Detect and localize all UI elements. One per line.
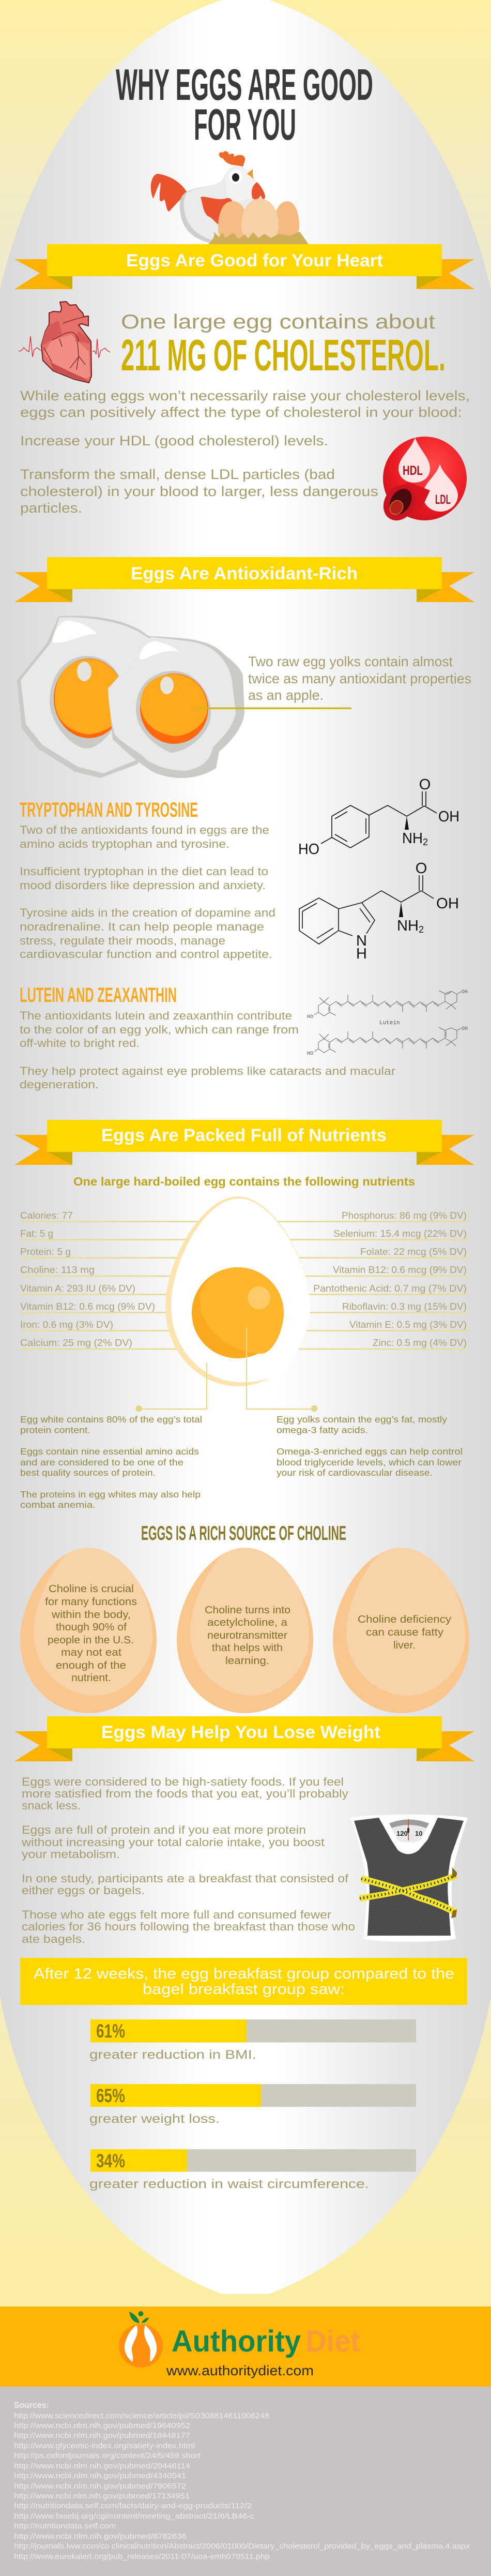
bar chart: 34%: greater reduction in waist circumference.	[89, 2177, 369, 2191]
heading ribbon: nutrients	[14, 1120, 474, 1165]
title: FOR YOU	[194, 100, 296, 149]
chart: tryptophan molecule: 2	[419, 924, 424, 935]
heading ribbon: heart: Eggs Are Good for Your Heart	[126, 251, 383, 271]
text block: tryptophan and tyrosine: noradrenaline. It can help people manage	[20, 920, 264, 933]
text block: lutein and zeaxanthin: to the color of an egg yolk, which can range from	[20, 1023, 299, 1036]
nutrients right column: Folate: 22 mcg (5% DV)	[360, 1246, 467, 1257]
heading ribbon: nutrients: Eggs Are Packed Full of Nutrients	[101, 1126, 387, 1145]
text block: cholesterol: Transform the small, dense LDL particles (bad	[20, 467, 335, 482]
chart: tyrosine molecule: O	[419, 776, 431, 793]
panel: choline egg 1: Choline is crucial	[49, 1583, 134, 1595]
icon: bathroom scale with tape: 120	[396, 1830, 408, 1837]
panel: choline egg 1: though 90% of	[56, 1621, 127, 1633]
heading ribbon: antioxidants: Eggs Are Antioxidant-Rich	[131, 564, 358, 583]
heading: tryptophan and tyrosine: TRYPTOPHAN AND TYROSINE	[20, 799, 198, 821]
text block: weight: more satisfied from the foods that you eat, you’ll probably	[22, 1787, 348, 1800]
nutrients left column: Fat: 5 g	[20, 1228, 53, 1239]
nutrients left column: Vitamin B12: 0.6 mcg (9% DV)	[20, 1301, 155, 1312]
connector: egg white	[135, 1362, 207, 1412]
panel: choline egg 3: Choline deficiency	[358, 1613, 452, 1625]
panel: choline egg 2	[177, 1541, 313, 1713]
panel: choline egg 3: liver.	[393, 1639, 416, 1651]
panel: sources: http://www.sciencedirect.com/science/article/pii/S0308814611006248	[14, 2412, 269, 2420]
nutrients right column: Zinc: 0.5 mg (4% DV)	[373, 1337, 467, 1348]
chart: tyrosine molecule: HO	[298, 841, 319, 858]
text block: tryptophan and tyrosine: Insufficient tryptophan in the diet can lead to	[20, 865, 268, 878]
panel: sources: http://www.ncbi.nlm.nih.gov/pubmed/19640952	[14, 2421, 190, 2430]
bar chart: 61%: greater reduction in BMI.	[89, 2048, 256, 2062]
cholesterol stat	[121, 311, 446, 380]
nutrients right column	[313, 1210, 467, 1348]
footer: logo band	[0, 2307, 491, 2387]
panel: sources: Sources:	[14, 2400, 49, 2410]
bar chart: 34%	[89, 2149, 416, 2191]
text block: weight: Those who ate eggs felt more full and consumed fewer	[22, 1908, 331, 1921]
text block: egg white: best quality sources of protein.	[20, 1467, 156, 1478]
panel: choline egg 2: Choline turns into	[205, 1604, 290, 1616]
text block: lutein and zeaxanthin: They help protect against eye problems like cataracts and macular	[20, 1065, 395, 1077]
nutrient leader lines	[20, 1221, 468, 1350]
bar chart: 61%	[89, 2019, 416, 2062]
icon: two fried eggs	[17, 616, 244, 778]
icon: Authority Diet logo	[119, 2311, 163, 2368]
callout: after 12 weeks: bagel breakfast group saw:	[143, 1981, 345, 1998]
text block: egg white: combat anemia.	[20, 1500, 96, 1510]
text block: egg yolk: omega-3 fatty acids.	[277, 1425, 368, 1435]
text block: egg yolk	[277, 1414, 463, 1478]
panel: choline egg 2: acetylcholine, a	[207, 1616, 288, 1628]
chart: lutein molecule: OH	[462, 1026, 468, 1032]
text block: weight: ate bagels.	[22, 1933, 85, 1945]
chart: tryptophan molecule: H	[356, 946, 367, 962]
text block: cholesterol: cholesterol) in your blood to larger, less dangerous	[20, 484, 378, 499]
panel: choline egg 2: neurotransmitter	[207, 1629, 287, 1641]
text block: tryptophan and tyrosine	[20, 823, 275, 961]
panel: sources: http://ps.oxfordjournals.org/content/24/5/459.short	[14, 2451, 201, 2460]
nutrients left column: Calcium: 25 mg (2% DV)	[20, 1337, 132, 1348]
text block: egg white: The proteins in egg whites may also help	[20, 1489, 201, 1500]
text block: tryptophan and tyrosine: mood disorders like depression and anxiety.	[20, 879, 266, 892]
chart: tyrosine molecule: OH	[438, 808, 459, 825]
chart: lutein molecule: Lutein	[379, 1020, 400, 1026]
bar chart: 61%: 61%	[96, 2020, 125, 2042]
text block: lutein and zeaxanthin	[20, 1009, 395, 1091]
icon: bathroom scale with tape	[350, 1815, 468, 1942]
text block: raw egg yolks: as an apple.	[248, 687, 324, 703]
footer: logo band: Authority	[172, 2325, 301, 2358]
callout: after 12 weeks: After 12 weeks, the egg breakfast group compared to the	[34, 1966, 454, 1982]
text block: weight: snack less.	[22, 1799, 81, 1812]
nutrients right column: Vitamin E: 0.5 mg (3% DV)	[349, 1319, 467, 1330]
panel: choline egg 3	[333, 1541, 469, 1713]
text block: egg yolk: blood triglyceride levels, which can lower	[277, 1457, 462, 1467]
text block: raw egg yolks: Two raw egg yolks contain almost	[248, 654, 453, 669]
panel: choline egg 1: people in the U.S.	[48, 1634, 134, 1646]
text block: cholesterol: Increase your HDL (good cholesterol) levels.	[20, 433, 328, 448]
icon: hard-boiled egg	[165, 1196, 310, 1386]
panel: sources: http://www.eurekalert.org/pub_releases/2011-07/uoa-emh070511.php	[14, 2552, 270, 2561]
callout: after 12 weeks	[20, 1958, 467, 2005]
text block: egg white: Eggs contain nine essential amino acids	[20, 1446, 199, 1457]
panel: choline egg 1: nutrient.	[71, 1672, 111, 1684]
panel: sources: http://www.ncbi.nlm.nih.gov/pubmed/8782636	[14, 2532, 187, 2541]
nutrients left column: Calories: 77	[20, 1210, 73, 1221]
icon: bathroom scale with tape: 10	[415, 1830, 422, 1837]
cholesterol stat: One large egg contains about	[121, 311, 435, 333]
heading ribbon: heart	[14, 244, 474, 289]
chart: lutein molecule: HO	[307, 1051, 313, 1057]
panel: sources: http://nutritiondata.self.com	[14, 2522, 116, 2530]
panel: choline egg 1	[20, 1541, 157, 1713]
panel: choline egg 2: that helps with	[212, 1642, 283, 1654]
connector: egg yolk	[247, 1327, 317, 1412]
panel: sources: http://www.fasebj.org/cgi/content/meeting_abstract/21/6/LB46-c	[14, 2512, 255, 2521]
chart: tryptophan molecule: N	[356, 933, 367, 949]
chart: lutein molecule: HO	[307, 1014, 313, 1020]
bar chart: 65%	[89, 2084, 416, 2126]
text block: cholesterol: eggs can positively affect the type of cholesterol in your blood:	[20, 405, 462, 420]
icon: HDL and LDL blood sphere: LDL	[435, 492, 451, 507]
text block: egg yolk: your risk of cardiovascular disease.	[277, 1467, 433, 1478]
chart: tyrosine molecule: 2	[423, 837, 428, 847]
text block: egg white: Egg white contains 80% of the egg’s total	[20, 1414, 202, 1425]
chart: tyrosine molecule: NH	[402, 830, 423, 847]
nutrients left column: Vitamin A: 293 IU (6% DV)	[20, 1283, 135, 1294]
heading ribbon: weight	[14, 1716, 474, 1761]
panel: choline egg 3: can cause fatty	[366, 1626, 444, 1638]
panel: sources: http://nutritiondata.self.com/facts/dairy-and-egg-products/112/2	[14, 2502, 252, 2510]
chart: tyrosine molecule	[298, 776, 459, 858]
icon: HDL and LDL blood sphere: HDL	[403, 463, 423, 478]
subheading: nutrients: One large hard-boiled egg contains the following nutrients	[73, 1175, 415, 1188]
text block: tryptophan and tyrosine: cardiovascular function and control appetite.	[20, 948, 272, 961]
icon: heart with pulse	[19, 302, 110, 383]
text block: raw egg yolks	[248, 654, 471, 703]
heading: lutein and zeaxanthin: LUTEIN AND ZEAXANTHIN	[20, 984, 177, 1007]
nutrients right column: Selenium: 15.4 mcg (22% DV)	[333, 1228, 467, 1239]
chart: tryptophan molecule: NH	[397, 918, 419, 934]
nutrients right column: Pantothenic Acid: 0.7 mg (7% DV)	[313, 1283, 467, 1294]
panel: sources: http://www.ncbi.nlm.nih.gov/pubmed/7906572	[14, 2482, 186, 2491]
nutrients left column: Iron: 0.6 mg (3% DV)	[20, 1319, 113, 1330]
chart: tryptophan molecule: O	[416, 860, 427, 877]
bar chart: 65%: greater weight loss.	[89, 2112, 220, 2126]
footer: logo band: Diet	[305, 2325, 360, 2358]
text block: weight: without increasing your total calorie intake, you boost	[21, 1836, 325, 1849]
title	[116, 61, 373, 149]
text block: weight: your metabolism.	[22, 1848, 120, 1861]
chart: tryptophan molecule	[299, 860, 459, 962]
chart: lutein molecule: OH	[462, 990, 468, 995]
panel: choline egg 1: for many functions	[45, 1596, 137, 1608]
panel: sources: http://www.glycemic-index.org/satiety-index.html	[14, 2442, 195, 2450]
text block: cholesterol: While eating eggs won’t necessarily raise your cholesterol levels,	[20, 388, 470, 403]
text block: lutein and zeaxanthin: The antioxidants lutein and zeaxanthin contribute	[20, 1009, 292, 1022]
text block: egg white: protein content.	[20, 1425, 90, 1435]
panel: sources: http://www.ncbi.nlm.nih.gov/pubmed/4340541	[14, 2472, 186, 2480]
text block: weight	[21, 1775, 355, 1945]
panel: choline egg 1: enough of the	[56, 1659, 126, 1671]
text block: egg yolk: Egg yolks contain the egg’s fat, mostly	[277, 1414, 447, 1425]
text block: egg yolk: Omega-3-enriched eggs can help control	[277, 1446, 463, 1457]
nutrients right column: Vitamin B12: 0.6 mcg (9% DV)	[333, 1264, 467, 1275]
chart: lutein molecule	[307, 990, 468, 1057]
text block: weight: Eggs were considered to be high-satiety foods. If you feel	[22, 1775, 344, 1788]
text block: tryptophan and tyrosine: Tyrosine aids in the creation of dopamine and	[20, 906, 275, 919]
text block: cholesterol	[20, 388, 470, 516]
footer: logo band: www.authoritydiet.com	[166, 2363, 314, 2378]
text block: weight: In one study, participants ate a breakfast that consisted of	[22, 1872, 349, 1885]
panel: sources: http://journals.lww.com/co clinicalnutrition/Abstract/2006/01000/Dietary_cholesterol_provided_by_eggs_and_plasma.4.aspx	[14, 2542, 470, 2551]
text block: egg white	[20, 1414, 202, 1510]
heading ribbon: weight: Eggs May Help You Lose Weight	[101, 1723, 380, 1742]
text block: cholesterol: particles.	[20, 500, 82, 516]
panel: sources: http://www.ncbi.nlm.nih.gov/pubmed/18448177	[14, 2431, 190, 2440]
nutrients right column: Riboflavin: 0.3 mg (15% DV)	[342, 1301, 467, 1312]
nutrients left column	[20, 1210, 155, 1348]
panel: choline egg 1: within the body,	[51, 1609, 131, 1621]
panel: sources	[0, 2387, 491, 2576]
text block: egg white: and are considered to be one of the	[20, 1457, 183, 1467]
bar chart: 34%: 34%	[96, 2150, 125, 2171]
panel: choline egg 2: learning.	[225, 1655, 269, 1667]
icon: HDL and LDL blood sphere	[377, 437, 467, 527]
bar chart: 65%: 65%	[96, 2085, 125, 2106]
text block: tryptophan and tyrosine: Two of the antioxidants found in eggs are the	[20, 823, 269, 836]
text block: lutein and zeaxanthin: degeneration.	[20, 1078, 99, 1091]
text block: tryptophan and tyrosine: amino acids tryptophan and tyrosine.	[20, 837, 229, 850]
panel: sources: http://www.ncbi.nlm.nih.gov/pubmed/20446114	[14, 2462, 190, 2470]
nutrients left column: Choline: 113 mg	[20, 1264, 95, 1275]
panel: choline egg 1: may not eat	[61, 1646, 121, 1658]
text block: lutein and zeaxanthin: off-white to bright red.	[20, 1037, 140, 1050]
leader line	[195, 708, 351, 709]
text block: raw egg yolks: twice as many antioxidant properties	[248, 671, 471, 686]
text block: weight: calories for 36 hours following the breakfast than those who	[22, 1920, 355, 1933]
nutrients right column: Phosphorus: 86 mg (9% DV)	[342, 1210, 467, 1221]
heading ribbon: antioxidants	[14, 557, 474, 602]
nutrients left column: Protein: 5 g	[20, 1246, 71, 1257]
text block: weight: either eggs or bagels.	[22, 1884, 145, 1897]
text block: tryptophan and tyrosine: stress, regulate their moods, manage	[20, 934, 225, 947]
panel: sources: http://www.ncbi.nlm.nih.gov/pubmed/17134951	[14, 2492, 190, 2500]
icon: hen on eggs	[151, 151, 309, 244]
chart: tryptophan molecule: OH	[436, 895, 459, 912]
text block: weight: Eggs are full of protein and if you eat more protein	[22, 1823, 306, 1836]
